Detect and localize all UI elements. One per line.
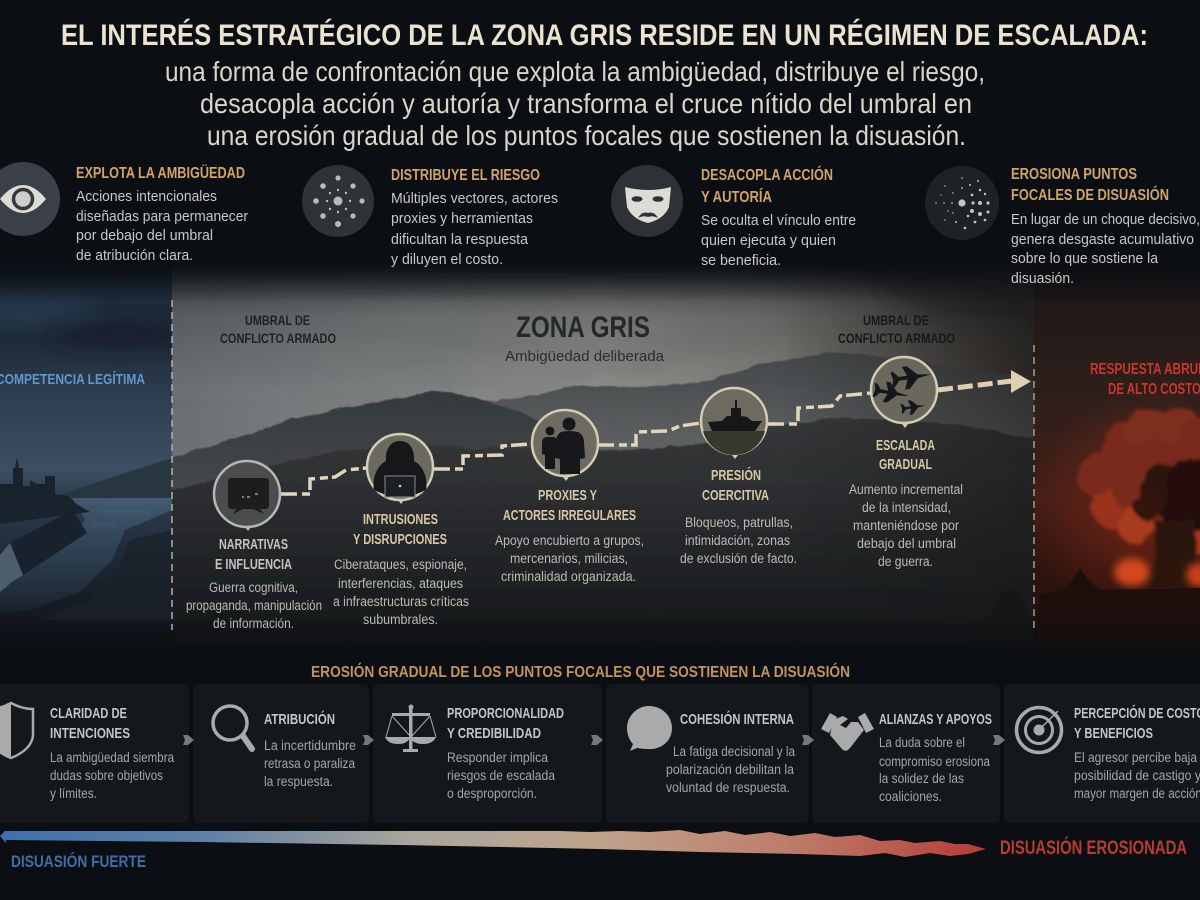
panel: erosiona puntos focales: EROSIONA PUNTOS bbox=[1011, 166, 1137, 183]
card: claridad de intenciones: CLARIDAD DE bbox=[50, 705, 127, 722]
panel: explota la ambigüedad: por debajo del umbral bbox=[76, 228, 213, 244]
panel: desacopla acción y autoría: quien ejecuta y quien bbox=[701, 233, 836, 249]
card: claridad de intenciones: dudas sobre objetivos bbox=[50, 768, 163, 783]
foreground hills bbox=[165, 418, 1040, 680]
step: presión coercitiva: COERCITIVA bbox=[702, 487, 769, 504]
card: claridad de intenciones: y límites. bbox=[50, 786, 97, 801]
icon: speech bubble bbox=[627, 706, 672, 751]
step: intrusiones y disrupciones: a infraestructuras críticas bbox=[333, 594, 469, 609]
panel: desacopla acción y autoría: se beneficia. bbox=[701, 253, 781, 269]
card: atribución: retrasa o paraliza bbox=[264, 756, 355, 771]
heading: zona gris bbox=[505, 311, 665, 365]
heading: zona gris: Ambigüedad deliberada bbox=[505, 348, 665, 365]
label: umbral derecho: CONFLICTO ARMADO bbox=[838, 330, 955, 346]
panel: erosiona puntos focales bbox=[925, 166, 1200, 287]
icon: target bbox=[1016, 708, 1062, 752]
step: escalada gradual: Aumento incremental bbox=[849, 482, 963, 497]
step: proxies y actores irregulares bbox=[495, 410, 644, 584]
card: atribución bbox=[193, 684, 369, 823]
card: cohesión interna bbox=[606, 684, 809, 823]
title: desacopla acción y autoría y transforma el cruce nítido del umbral en bbox=[200, 88, 972, 119]
card: alianzas y apoyos bbox=[812, 684, 1000, 823]
icon: shield bbox=[0, 703, 33, 758]
icon: speech screen bbox=[214, 461, 280, 531]
label: disuasión fuerte: DISUASIÓN FUERTE bbox=[11, 852, 146, 871]
panel: erosiona puntos focales: disuasión. bbox=[1011, 271, 1074, 287]
card: alianzas y apoyos: la solidez de las bbox=[879, 771, 964, 786]
card: cohesión interna: La fatiga decisional y la bbox=[673, 744, 795, 759]
card: proporcionalidad y credibilidad: o desproporción. bbox=[447, 786, 537, 801]
card: atribución: la respuesta. bbox=[264, 774, 333, 789]
label: umbral izquierdo: CONFLICTO ARMADO bbox=[220, 330, 336, 346]
arrow: deterrence erosion scale bbox=[0, 830, 986, 857]
title: una erosión gradual de los puntos focales que sostienen la disuasión. bbox=[207, 120, 966, 151]
fire cloud bbox=[1077, 407, 1200, 590]
step: proxies y actores irregulares: Apoyo encubierto a grupos, bbox=[495, 533, 644, 548]
step: intrusiones y disrupciones: subumbrales. bbox=[363, 612, 438, 627]
arrow: escalation staircase bbox=[281, 370, 1031, 494]
step: narrativas e influencia: propaganda, manipulación bbox=[186, 598, 322, 613]
step: presión coercitiva: intimidación, zonas bbox=[685, 533, 790, 548]
fade from the upper band into the scene bbox=[0, 250, 1200, 302]
threshold lines bbox=[172, 300, 1034, 630]
step: intrusiones y disrupciones: INTRUSIONES bbox=[363, 511, 438, 528]
card: proporcionalidad y credibilidad: Y CREDIBILIDAD bbox=[447, 725, 541, 742]
step: escalada gradual: GRADUAL bbox=[879, 456, 932, 473]
label: competencia legítima: COMPETENCIA LEGÍTIMA bbox=[0, 371, 145, 388]
heading: zona gris: ZONA GRIS bbox=[516, 311, 650, 344]
panel: desacopla acción y autoría: DESACOPLA ACCIÓN bbox=[701, 165, 833, 184]
scene: left competition landscape bbox=[0, 274, 172, 630]
label: umbral izquierdo bbox=[220, 312, 336, 346]
step: proxies y actores irregulares: ACTORES IRREGULARES bbox=[503, 507, 636, 524]
title bbox=[61, 18, 1148, 151]
left mountain bbox=[172, 390, 538, 490]
step: narrativas e influencia: Guerra cognitiva, bbox=[209, 580, 298, 595]
step: presión coercitiva: PRESIÓN bbox=[711, 466, 761, 484]
card: percepción de costos bbox=[1004, 684, 1200, 823]
icon: scales bbox=[385, 704, 436, 752]
panel: erosiona puntos focales: sobre lo que sostiene la bbox=[1011, 251, 1159, 267]
panel: explota la ambigüedad: EXPLOTA LA AMBIGÜEDAD bbox=[76, 163, 245, 182]
label: umbral derecho bbox=[838, 312, 955, 346]
card: atribución: ATRIBUCIÓN bbox=[264, 710, 335, 728]
card: proporcionalidad y credibilidad: riesgos de escalada bbox=[447, 768, 555, 783]
back mountains bbox=[486, 352, 1034, 451]
step: narrativas e influencia: E INFLUENCIA bbox=[215, 556, 292, 573]
icon: dispersed network bbox=[302, 165, 374, 237]
icon: warship bbox=[701, 388, 767, 459]
step: intrusiones y disrupciones: Y DISRUPCIONES bbox=[353, 531, 447, 548]
step: intrusiones y disrupciones: interferencias, ataques bbox=[338, 576, 463, 591]
panel: distribuye el riesgo: y diluyen el costo. bbox=[391, 252, 503, 268]
step: escalada gradual: ESCALADA bbox=[876, 437, 935, 454]
step: escalada gradual: manteniéndose por bbox=[853, 518, 959, 533]
step: narrativas e influencia: NARRATIVAS bbox=[219, 536, 288, 553]
left handshake arm bbox=[10, 510, 87, 575]
icon: eye bbox=[0, 162, 60, 236]
panel: explota la ambigüedad bbox=[0, 162, 248, 264]
step: intrusiones y disrupciones bbox=[333, 434, 469, 627]
scene: central grey zone landscape bbox=[172, 270, 1034, 634]
panel: distribuye el riesgo: Múltiples vectores, actores bbox=[391, 191, 558, 207]
icon: fighter jets bbox=[871, 357, 937, 428]
icon: hooded hacker bbox=[367, 434, 433, 504]
step: escalada gradual bbox=[849, 357, 963, 569]
card: proporcionalidad y credibilidad bbox=[373, 684, 602, 823]
card: alianzas y apoyos: compromiso erosiona bbox=[879, 754, 990, 769]
scene: right abrupt response landscape bbox=[1034, 285, 1200, 640]
panel: explota la ambigüedad: de atribución clara. bbox=[76, 248, 193, 264]
fade to the lower band bbox=[0, 615, 1200, 665]
card: cohesión interna: COHESIÓN INTERNA bbox=[680, 710, 794, 728]
step: proxies y actores irregulares: criminalidad organizada. bbox=[501, 569, 636, 584]
step: proxies y actores irregulares: PROXIES Y bbox=[538, 487, 597, 504]
icon: handshake bbox=[821, 713, 874, 751]
step: escalada gradual: de guerra. bbox=[878, 554, 933, 569]
card: claridad de intenciones bbox=[0, 684, 189, 823]
title: una forma de confrontación que explota la ambigüedad, distribuye el riesgo, bbox=[165, 56, 985, 87]
label: respuesta abrupta bbox=[1090, 361, 1200, 398]
arrows between cards bbox=[183, 735, 1005, 745]
panel: desacopla acción y autoría bbox=[611, 165, 856, 269]
step: presión coercitiva: Bloqueos, patrullas, bbox=[685, 515, 793, 530]
step: narrativas e influencia bbox=[186, 461, 322, 631]
panel: distribuye el riesgo: DISTRIBUYE EL RIESGO bbox=[391, 167, 540, 184]
card: alianzas y apoyos: La duda sobre el bbox=[879, 735, 965, 750]
panel: desacopla acción y autoría: Y AUTORÍA bbox=[701, 187, 772, 206]
step: proxies y actores irregulares: mercenarios, milicias, bbox=[510, 551, 628, 566]
panel: distribuye el riesgo: dificultan la respuesta bbox=[391, 232, 529, 248]
panel: distribuye el riesgo: proxies y herramientas bbox=[391, 211, 533, 227]
panel: distribuye el riesgo bbox=[302, 165, 558, 268]
panel: erosiona puntos focales: genera desgaste acumulativo bbox=[1011, 232, 1194, 248]
card: cohesión interna: voluntad de respuesta. bbox=[666, 780, 790, 795]
card: cohesión interna: polarización debilitan la bbox=[666, 762, 794, 777]
icon: mask bbox=[611, 165, 683, 237]
heading: erosión gradual: EROSIÓN GRADUAL DE LOS PUNTOS FOCALES QUE SOSTIENEN LA DISUASIÓN bbox=[311, 662, 850, 681]
card: claridad de intenciones: INTENCIONES bbox=[50, 725, 130, 742]
step: presión coercitiva: de exclusión de facto. bbox=[680, 551, 797, 566]
icon: magnifier bbox=[213, 706, 252, 749]
label: umbral izquierdo: UMBRAL DE bbox=[245, 312, 310, 328]
step: escalada gradual: de la intensidad, bbox=[862, 500, 951, 515]
panel: explota la ambigüedad: diseñadas para permanecer bbox=[76, 209, 248, 225]
step: narrativas e influencia: de información. bbox=[213, 616, 294, 631]
icon: two figures bbox=[532, 410, 598, 481]
card: atribución: La incertidumbre bbox=[264, 738, 356, 753]
step: escalada gradual: debajo del umbral bbox=[857, 536, 956, 551]
card: alianzas y apoyos: ALIANZAS Y APOYOS bbox=[879, 711, 992, 728]
card: proporcionalidad y credibilidad: PROPORCIONALIDAD bbox=[447, 705, 564, 722]
card: claridad de intenciones: La ambigüedad siembra bbox=[50, 750, 174, 765]
step: intrusiones y disrupciones: Ciberataques, espionaje, bbox=[334, 557, 467, 572]
label: umbral derecho: UMBRAL DE bbox=[863, 312, 929, 328]
card: alianzas y apoyos: coaliciones. bbox=[879, 789, 942, 804]
panel: desacopla acción y autoría: Se oculta el vínculo entre bbox=[701, 213, 856, 229]
step: presión coercitiva bbox=[680, 388, 797, 566]
panel: explota la ambigüedad: Acciones intencionales bbox=[76, 189, 217, 205]
icon: eroding dots bbox=[925, 166, 999, 240]
card: proporcionalidad y credibilidad: Responder implica bbox=[447, 750, 548, 765]
card: percepción de costos: Y BENEFICIOS bbox=[1074, 725, 1153, 742]
